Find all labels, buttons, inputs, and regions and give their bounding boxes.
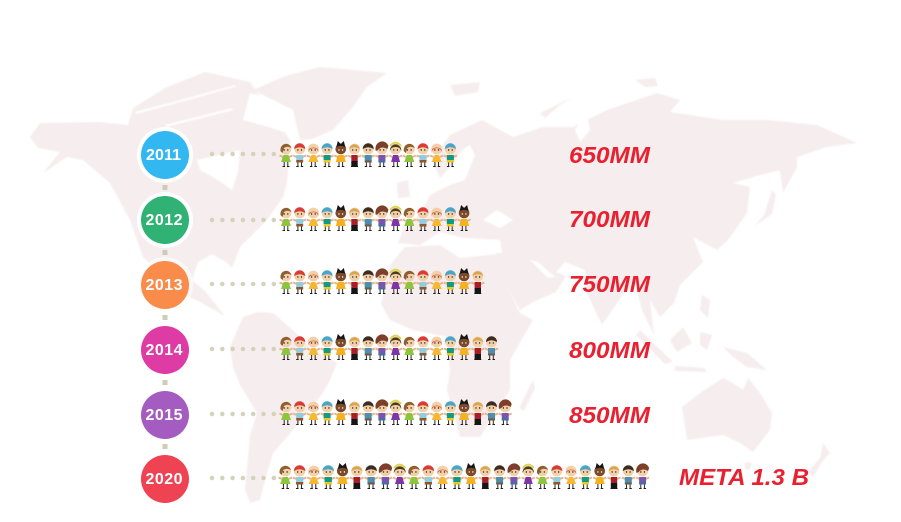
year badge 2012 (137, 192, 193, 248)
islands (397, 78, 776, 470)
North America (30, 72, 290, 316)
South America (230, 312, 337, 503)
children 2013 (280, 268, 484, 294)
Madagascar (519, 380, 535, 411)
Greenland (253, 67, 387, 140)
value 2013: 750MM (569, 271, 651, 297)
children 2011 (280, 141, 457, 167)
New Zealand (808, 443, 830, 477)
row 2012 (137, 192, 651, 248)
dotted leader 2020 (212, 476, 276, 480)
row 2011 (137, 127, 651, 183)
year badge 2013 (137, 257, 193, 313)
row 2015 (141, 391, 651, 439)
row 2013 (137, 257, 651, 313)
year badge 2020 (141, 455, 189, 503)
row 2014 (141, 326, 651, 374)
inland seas (135, 85, 590, 278)
children 2015 (280, 399, 512, 425)
connector between year circles (162, 185, 168, 449)
year badge 2015 (141, 391, 189, 439)
year badge 2020: 2020 (146, 471, 183, 488)
year badge 2015: 2015 (146, 407, 183, 424)
row 2020 (141, 455, 809, 503)
value 2015: 850MM (569, 402, 651, 428)
value 2011: 650MM (569, 142, 651, 168)
children 2014 (280, 334, 498, 360)
Eurasia (398, 93, 857, 335)
value 2020: META 1.3 B (679, 464, 809, 490)
year badge 2012: 2012 (146, 212, 183, 229)
dotted leader 2013 (212, 282, 276, 286)
year badge 2014 (141, 326, 189, 374)
value 2012: 700MM (569, 206, 651, 232)
world map background (30, 67, 857, 503)
year badge 2013: 2013 (146, 277, 183, 294)
dotted leader 2012 (212, 218, 276, 222)
value 2014: 800MM (569, 337, 651, 363)
children 2012 (280, 205, 471, 231)
year badge 2014: 2014 (146, 342, 183, 359)
Australia (682, 378, 772, 452)
children 2020 (279, 463, 649, 489)
year badge 2011: 2011 (146, 147, 181, 164)
year badge 2011 (137, 127, 193, 183)
Africa (381, 245, 533, 437)
dotted leader 2014 (212, 347, 276, 351)
dotted leader 2011 (212, 152, 276, 156)
dotted leader 2015 (212, 412, 276, 416)
